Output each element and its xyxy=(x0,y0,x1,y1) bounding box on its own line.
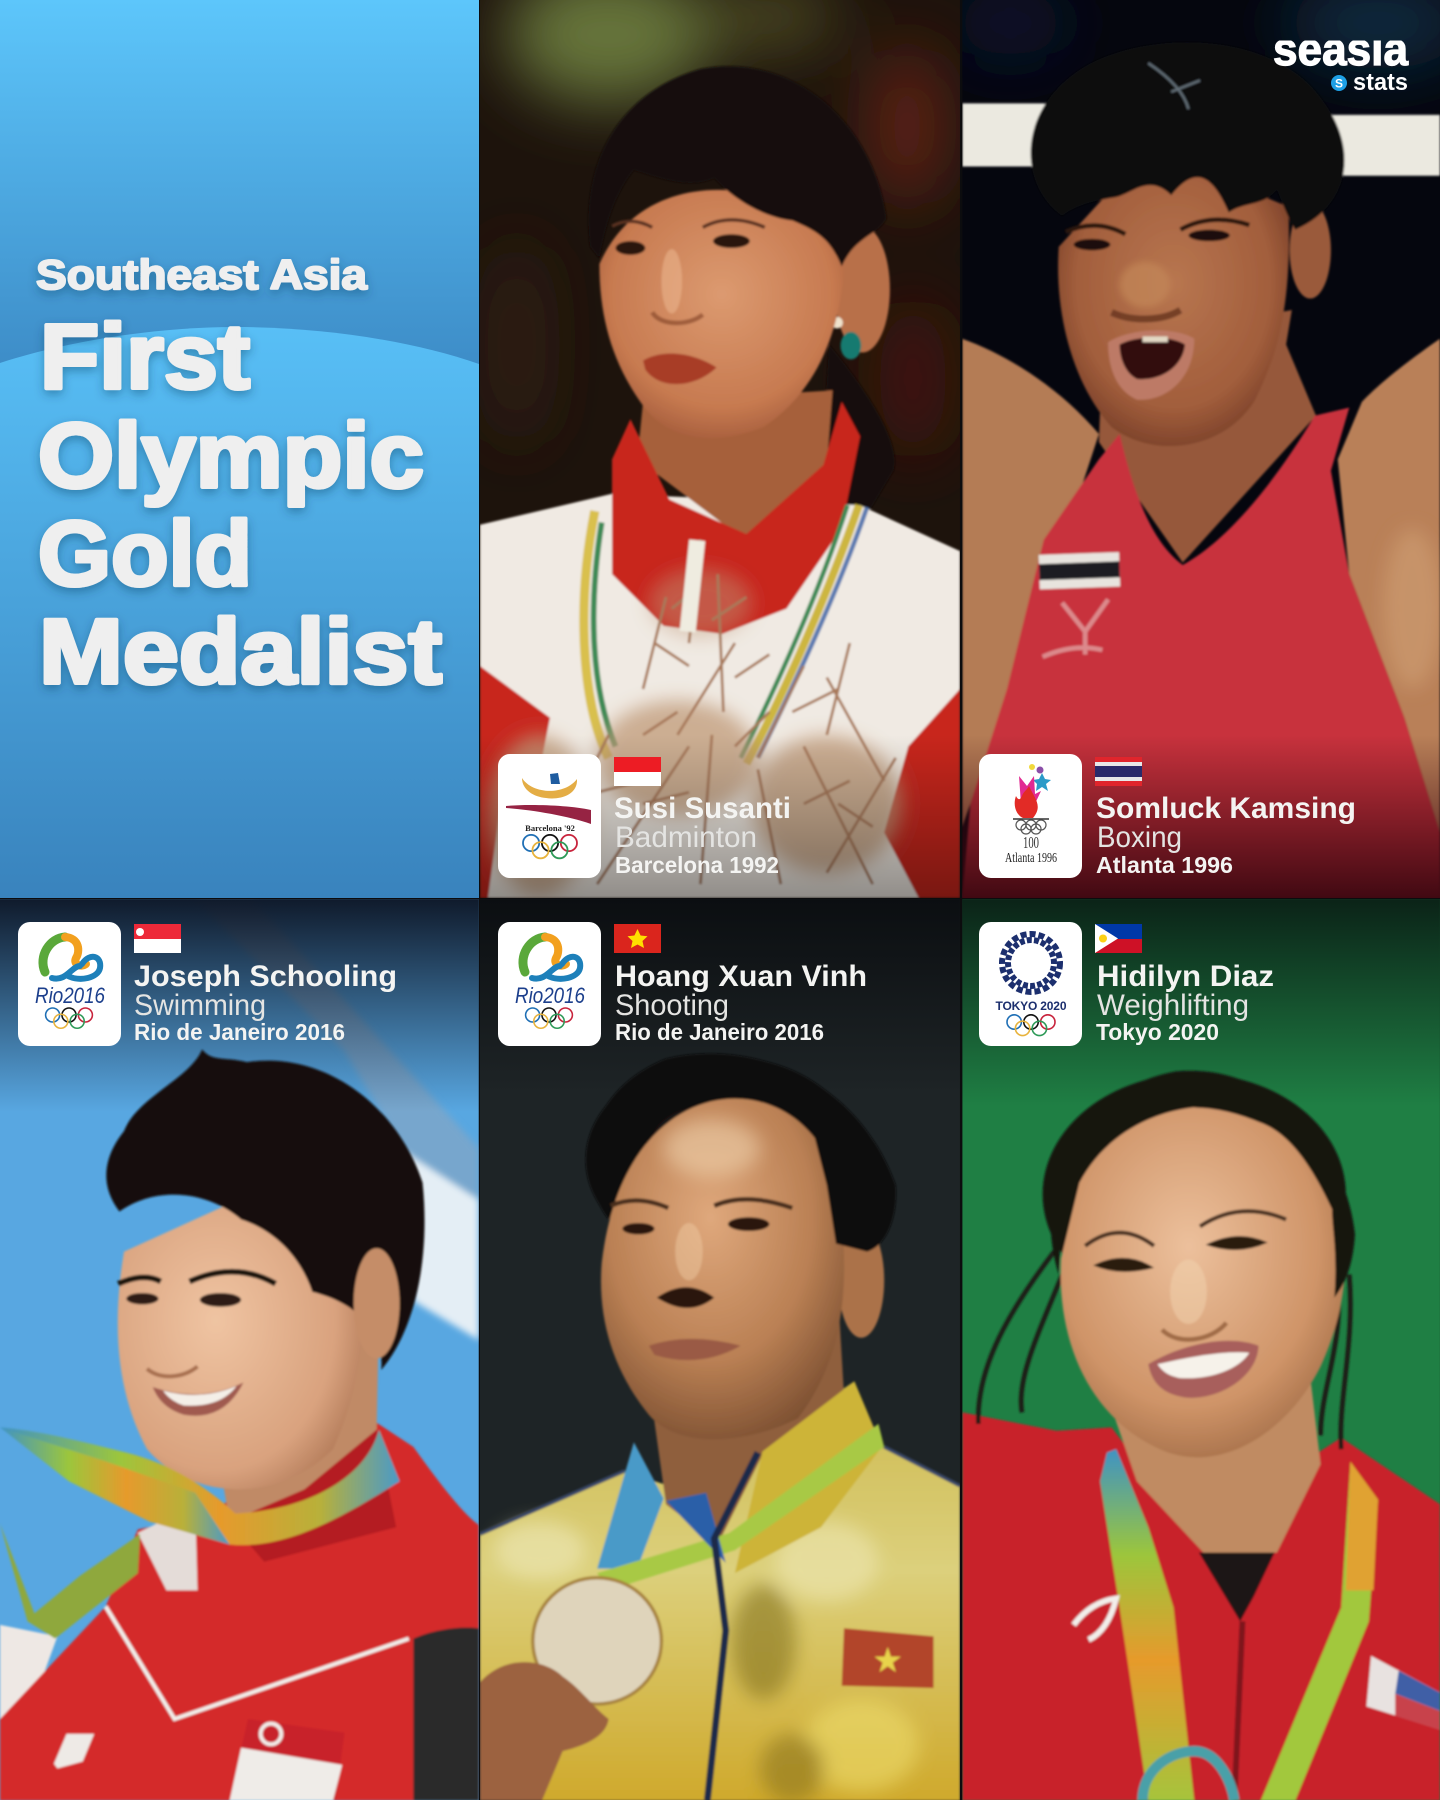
flag: Vietnam xyxy=(614,924,661,953)
face xyxy=(1061,1106,1346,1457)
hair backing xyxy=(1043,1074,1346,1315)
logo: Rio 2016: Rio2016 xyxy=(515,983,586,1008)
hair xyxy=(589,1054,896,1252)
flag: Philippines xyxy=(1095,924,1142,953)
logo: seasia stats: S xyxy=(1335,76,1343,90)
games: Rio de Janeiro 2016 xyxy=(615,1019,824,1045)
eyes xyxy=(622,1223,655,1234)
heading: First Olympic Gold Medalist: Olympic xyxy=(38,405,424,507)
flag patch xyxy=(842,1628,934,1688)
nose xyxy=(147,1366,198,1376)
panel: Somluck Kamsing portrait xyxy=(953,0,1440,898)
neck xyxy=(1099,310,1316,563)
heading: First Olympic Gold Medalist: Gold xyxy=(38,503,252,605)
nose xyxy=(1120,262,1170,308)
nose xyxy=(661,249,682,313)
medal ribbons xyxy=(1100,1449,1194,1800)
logo: Atlanta 1996: Atlanta 1996 xyxy=(1005,851,1057,866)
collar xyxy=(230,1430,396,1562)
heading: First Olympic Gold Medalist: First xyxy=(40,306,250,408)
singlet xyxy=(962,408,1440,898)
games: Rio de Janeiro 2016 xyxy=(134,1019,345,1045)
neck xyxy=(1107,1366,1321,1553)
ponytail xyxy=(826,344,896,510)
jacket xyxy=(0,1423,479,1800)
raised arms xyxy=(962,339,1099,827)
jacket xyxy=(480,1381,960,1800)
flag: Singapore xyxy=(134,924,181,953)
kit logo xyxy=(1074,1598,1116,1640)
sport: Shooting xyxy=(615,989,729,1022)
eyes xyxy=(1093,1236,1268,1272)
athlete name: Hidilyn Diaz xyxy=(1097,960,1274,993)
medal ring xyxy=(1143,1751,1234,1800)
caption: Somluck Kamsing xyxy=(979,754,1356,878)
face xyxy=(118,1183,363,1489)
smile xyxy=(1148,1341,1259,1398)
ear xyxy=(838,1223,884,1338)
kit logo xyxy=(1043,599,1108,657)
zipper xyxy=(707,1453,758,1800)
neck xyxy=(212,1321,379,1521)
shirt underlay xyxy=(0,1625,57,1719)
eyes xyxy=(1074,239,1110,250)
gold medal xyxy=(533,1578,661,1704)
panel: Susi Susanti portrait xyxy=(480,0,960,898)
caption: Hidilyn Diaz xyxy=(979,922,1274,1046)
sport: Boxing xyxy=(1097,821,1182,854)
ear xyxy=(1290,202,1331,299)
sport: Swimming xyxy=(134,989,266,1022)
forehead shine xyxy=(664,1120,760,1177)
panel: Hoang Xuan Vinh portrait: ★ xyxy=(872,1642,903,1680)
nose xyxy=(657,1287,714,1308)
ear xyxy=(835,226,890,353)
back hair strands xyxy=(978,1252,1350,1449)
heading: Southeast Asia: Southeast Asia xyxy=(36,251,368,298)
medal ribbon xyxy=(0,1427,400,1545)
mouth xyxy=(643,354,717,384)
hair xyxy=(1031,42,1345,230)
panel: Hidilyn Diaz portrait xyxy=(962,899,1440,1800)
sport: Badminton xyxy=(615,821,757,854)
panel: Hoang Xuan Vinh portrait xyxy=(480,899,960,1800)
panel: title xyxy=(0,0,479,898)
flag: Indonesia xyxy=(614,757,661,786)
logo: Atlanta 1996: 100 xyxy=(1023,833,1039,852)
panel: Joseph Schooling portrait xyxy=(0,899,479,1800)
flag patch xyxy=(230,1719,344,1800)
heading: First Olympic Gold Medalist xyxy=(38,306,442,703)
hair xyxy=(106,1050,425,1370)
flag patch xyxy=(1039,552,1120,589)
smile xyxy=(153,1383,243,1416)
mouth xyxy=(1108,331,1194,400)
face xyxy=(601,1099,844,1439)
collar xyxy=(735,1381,882,1573)
logo: Tokyo 2020 xyxy=(979,922,1082,1046)
eyes xyxy=(126,1293,158,1304)
caption: Susi Susanti xyxy=(498,754,791,878)
flag: Thailand xyxy=(1095,757,1142,786)
sport: Weighlifting xyxy=(1097,989,1249,1022)
games: Tokyo 2020 xyxy=(1096,1019,1219,1045)
logo: Rio 2016 xyxy=(498,922,601,1046)
neck xyxy=(637,390,833,540)
athlete name: Hoang Xuan Vinh xyxy=(615,960,867,993)
athlete name: Joseph Schooling xyxy=(134,960,397,993)
ring ropes xyxy=(962,103,1045,167)
neck xyxy=(650,1298,844,1544)
flowers xyxy=(488,568,901,896)
logo: seasia stats: stats xyxy=(1353,69,1408,96)
caption: Joseph Schooling xyxy=(18,922,397,1046)
zipper xyxy=(1234,1621,1242,1800)
logo: Rio 2016: Rio2016 xyxy=(35,983,106,1008)
eyes and brows xyxy=(615,241,645,255)
logo: seasia stats xyxy=(1273,23,1408,96)
hair xyxy=(589,66,886,266)
athlete name: Somluck Kamsing xyxy=(1096,792,1356,825)
nose xyxy=(1162,1323,1226,1340)
face xyxy=(1058,149,1289,446)
logo: seasia stats: seasia xyxy=(1273,23,1408,75)
logo: Atlanta 1996 xyxy=(979,754,1082,878)
athlete name: Susi Susanti xyxy=(614,792,791,825)
mouth xyxy=(649,1339,741,1360)
caption: Hoang Xuan Vinh xyxy=(498,922,867,1046)
logo: Barcelona 1992: Barcelona '92 xyxy=(525,823,575,833)
hand xyxy=(480,1662,609,1800)
jacket xyxy=(480,494,960,898)
flag patch xyxy=(1366,1656,1440,1729)
hair xyxy=(1051,1071,1355,1298)
games: Barcelona 1992 xyxy=(615,852,779,878)
logo: Barcelona 1992 xyxy=(498,754,601,878)
collar xyxy=(612,402,860,634)
hair backing xyxy=(586,1056,861,1263)
face xyxy=(599,190,844,438)
logo: Tokyo 2020: TOKYO 2020 xyxy=(996,999,1067,1013)
logo: Rio 2016 xyxy=(18,922,121,1046)
medal ribbons xyxy=(584,511,609,758)
shirt xyxy=(962,1412,1440,1800)
heading: First Olympic Gold Medalist: Medalist xyxy=(39,601,442,703)
games: Atlanta 1996 xyxy=(1096,852,1233,878)
ear xyxy=(354,1248,400,1358)
